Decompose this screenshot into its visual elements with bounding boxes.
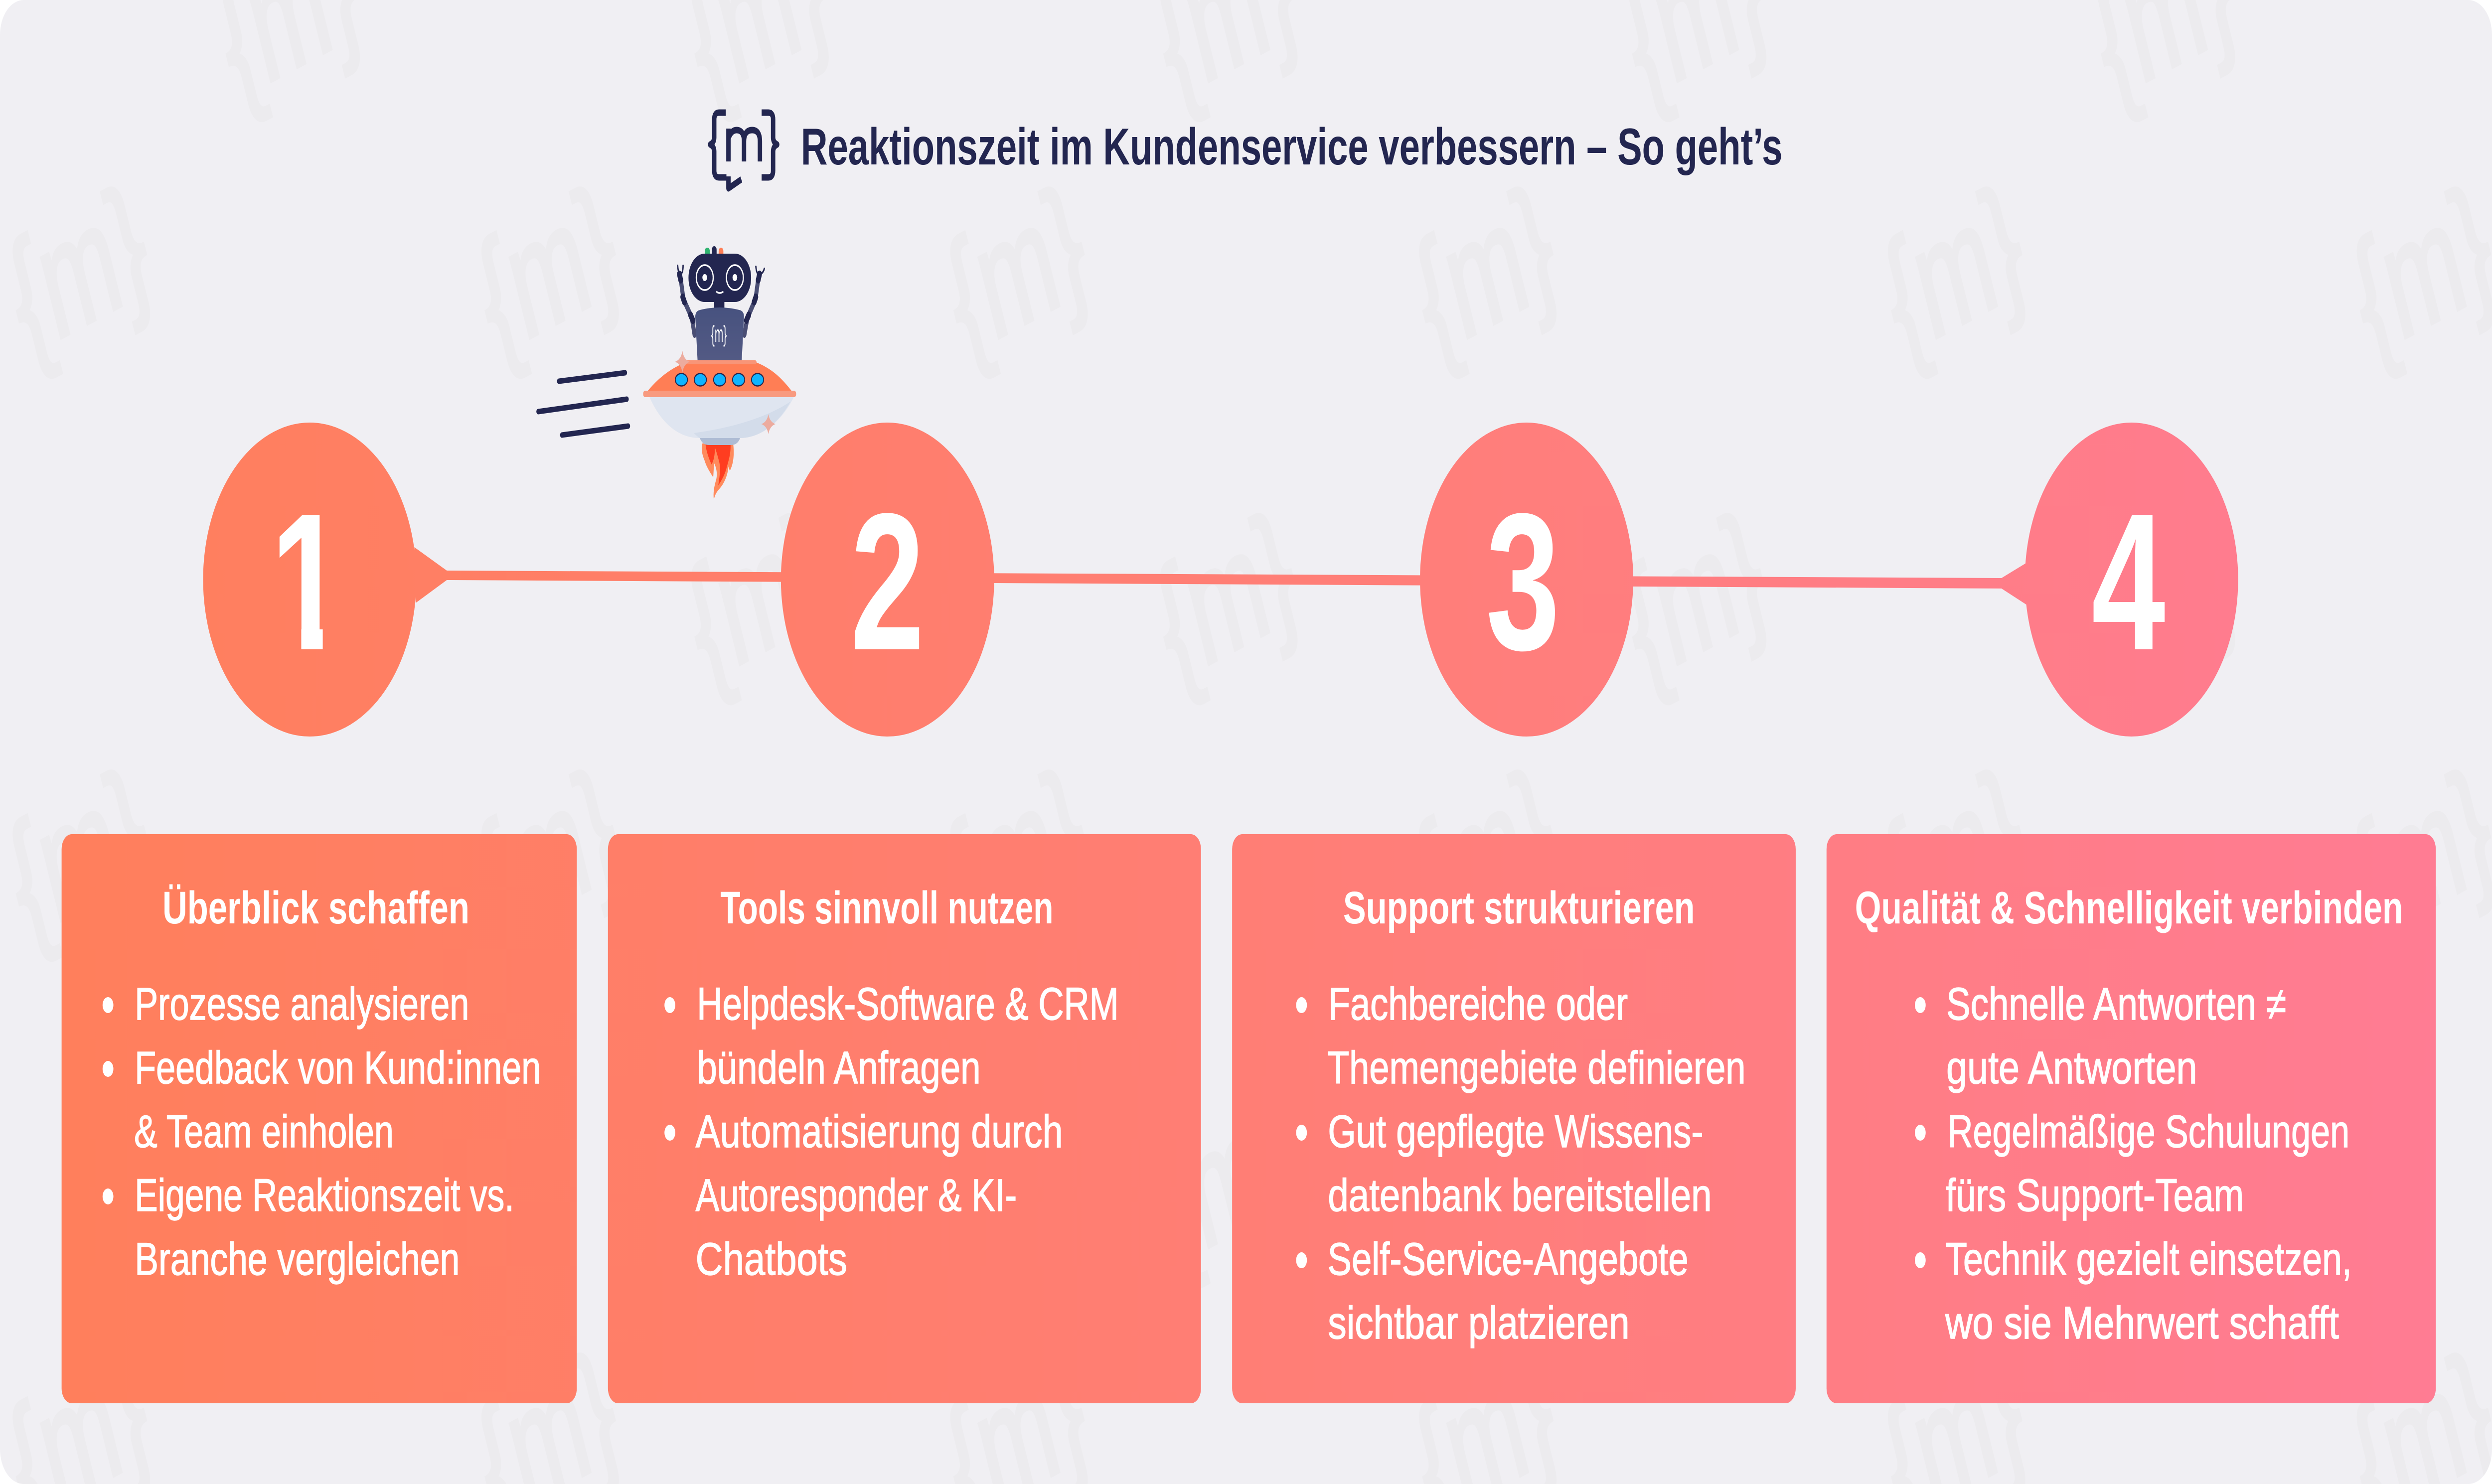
saucer hull bbox=[649, 397, 794, 438]
number 3: 3 bbox=[1486, 473, 1560, 691]
robot antennas bbox=[705, 246, 723, 258]
bullet list: Autoresponder & KI- bbox=[696, 1170, 1017, 1221]
bullet list: & Team einholen bbox=[134, 1106, 394, 1157]
bullet list bbox=[103, 978, 541, 1285]
robot eyes bbox=[696, 265, 743, 293]
step circle 4 bbox=[2025, 423, 2238, 737]
title: Reaktionszeit im Kundenservice verbessern – So geht’s bbox=[801, 118, 1782, 175]
bullet list: bündeln Anfragen bbox=[697, 1042, 981, 1093]
bullet list bbox=[1296, 978, 1745, 1348]
bullet list: Fachbereiche oder bbox=[1328, 978, 1628, 1030]
bullet list: Automatisierung durch bbox=[696, 1106, 1063, 1157]
card heading: Support strukturieren bbox=[1343, 882, 1695, 933]
card heading: Qualität & Schnelligkeit verbinden bbox=[1855, 882, 2403, 933]
robot body logo: {m} bbox=[711, 321, 727, 347]
saucer nozzle bbox=[700, 438, 740, 445]
step circle 3 bbox=[1420, 423, 1633, 737]
panel: Tools sinnvoll nutzen bbox=[608, 834, 1201, 1403]
icon: robot in flying saucer bbox=[643, 246, 796, 500]
bullet list: Branche vergleichen bbox=[135, 1233, 460, 1285]
number 4: 4 bbox=[2092, 473, 2166, 691]
card heading: Überblick schaffen bbox=[162, 882, 469, 933]
saucer hull shade bbox=[694, 402, 790, 438]
connector line bbox=[414, 547, 2027, 605]
step circle 1 bbox=[203, 423, 416, 737]
bullet list bbox=[664, 978, 1119, 1285]
bullet list: Technik gezielt einsetzen, bbox=[1945, 1233, 2352, 1285]
bullet list: Chatbots bbox=[696, 1233, 847, 1285]
saucer dome bbox=[648, 362, 791, 391]
number 1: 1 bbox=[271, 473, 344, 691]
panel: Überblick schaffen bbox=[62, 834, 577, 1403]
step circle 2 bbox=[781, 423, 994, 737]
bullet list: wo sie Mehrwert schafft bbox=[1945, 1297, 2339, 1348]
panel: Support strukturieren bbox=[1232, 834, 1796, 1403]
saucer windows bbox=[675, 374, 764, 386]
bullet list: Themengebiete definieren bbox=[1327, 1042, 1745, 1093]
saucer rim bbox=[643, 391, 796, 397]
robot head bbox=[688, 254, 751, 302]
bullet list: Prozesse analysieren bbox=[135, 978, 469, 1030]
number 2: 2 bbox=[851, 473, 925, 691]
bullet list: Self-Service-Angebote bbox=[1328, 1233, 1689, 1285]
robot body bbox=[695, 307, 744, 362]
bullet list: datenbank bereitstellen bbox=[1328, 1170, 1712, 1221]
bullet list: sichtbar platzieren bbox=[1328, 1297, 1629, 1348]
bullet list: Eigene Reaktionszeit vs. bbox=[135, 1170, 514, 1221]
icon: speed lines bbox=[538, 373, 628, 435]
bullet list: Schnelle Antworten ≠ bbox=[1946, 978, 2286, 1030]
bullet list: Helpdesk-Software & CRM bbox=[697, 978, 1119, 1030]
saucer top rim bbox=[686, 360, 757, 364]
bullet list: Feedback von Kund:innen bbox=[135, 1042, 541, 1093]
panel: Qualität & Schnelligkeit verbinden bbox=[1827, 834, 2436, 1403]
icon: brand logo bbox=[710, 113, 777, 188]
bullet list: Gut gepflegte Wissens- bbox=[1328, 1106, 1704, 1157]
saucer flame bbox=[702, 444, 734, 500]
bullet list bbox=[1915, 978, 2352, 1348]
robot neck bbox=[714, 299, 724, 311]
bullet list: gute Antworten bbox=[1946, 1042, 2197, 1093]
bullet list: Regelmäßige Schulungen bbox=[1948, 1106, 2349, 1157]
bullet list: fürs Support-Team bbox=[1946, 1170, 2244, 1221]
sparkles bbox=[675, 351, 776, 434]
robot arms bbox=[678, 266, 765, 335]
card heading: Tools sinnvoll nutzen bbox=[720, 882, 1054, 933]
